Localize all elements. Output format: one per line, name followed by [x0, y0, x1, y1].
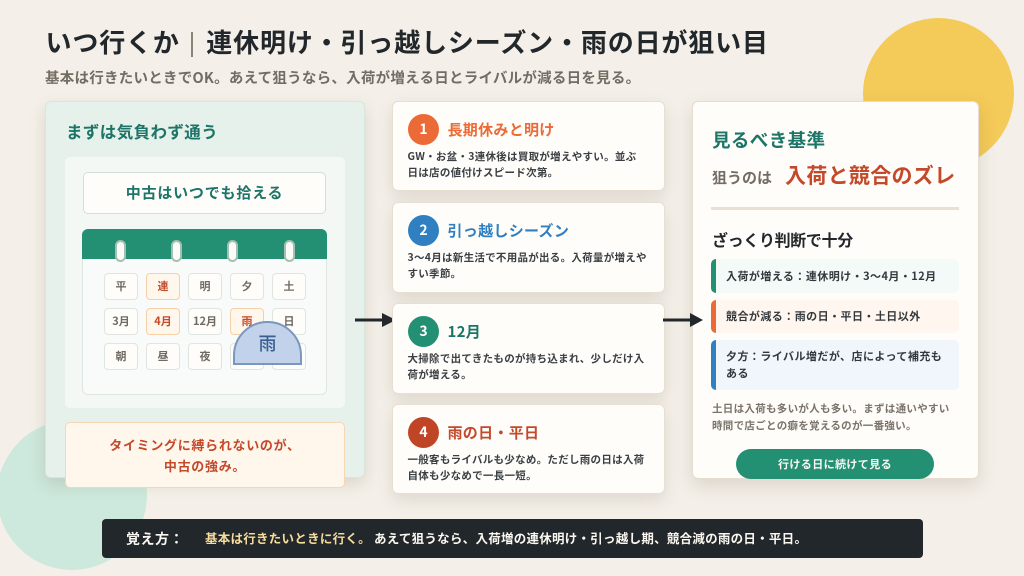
decorative circle: mint: [0, 420, 147, 570]
callout: [65, 422, 345, 488]
callout: 中古の強み。: [164, 456, 246, 475]
icon: rain umbrella dome: [233, 321, 302, 365]
number badge: 1: [419, 119, 428, 139]
number badge: [408, 316, 439, 347]
card body: 荷が増える。: [408, 367, 472, 382]
arrow: cards to right panel: [663, 313, 703, 327]
calendar: 連: [158, 278, 168, 294]
card title: 12月: [448, 321, 481, 342]
button: 行ける日に続けて見る: [778, 456, 892, 472]
calendar: 平: [116, 278, 126, 294]
subtitle: 基本は行きたいときでOK。あえて狙うなら、入荷が増える日とライバルが減る日を見る。: [45, 67, 640, 88]
sub heading: ざっくり判断で十分: [712, 227, 853, 251]
card body: すい季節。: [408, 266, 461, 281]
summary label: 覚え方：: [126, 529, 184, 549]
row: stock increases: [711, 259, 959, 293]
calendar: [82, 229, 327, 395]
row text: 入荷が増える：連休明け・3〜4月・12月: [726, 268, 937, 284]
number badge: 2: [419, 220, 428, 240]
row text: 競合が減る：雨の日・平日・土日以外: [726, 308, 921, 324]
number badge: 3: [419, 321, 428, 341]
calendar: 明: [200, 278, 210, 294]
target line: [712, 160, 955, 190]
callout: タイミングに縛られないのが、: [109, 435, 301, 454]
number badge: 4: [419, 422, 428, 442]
card title: 引っ越しシーズン: [448, 220, 569, 241]
card body: 大掃除で出てきたものが持ち込まれ、少しだけ入: [408, 351, 644, 366]
calendar: 日: [284, 313, 294, 329]
panel heading: まずは気負わず通う: [66, 119, 218, 143]
card body: [408, 250, 647, 281]
calendar header: [82, 228, 326, 258]
decorative circle: yellow: [863, 18, 1014, 169]
panel: right, criteria: [692, 101, 979, 479]
card body: [408, 452, 644, 483]
card title: 長期休みと明け: [448, 119, 555, 140]
criteria heading: 見るべき基準: [712, 127, 825, 153]
note: 土日は入荷も多いが人も多い。まずは通いやすい: [712, 401, 950, 416]
note: 時間で店ごとの癖を覚えるのが一番強い。: [712, 418, 917, 432]
row text: ある: [726, 365, 749, 381]
card 3: [392, 303, 665, 394]
title: いつ行くか 連休明け・引っ越しシーズン・雨の日が狙い目: [46, 23, 769, 60]
card body: 3〜4月は新生活で不用品が出る。入荷量が増えや: [408, 250, 647, 265]
card body: GW・お盆・3連休後は買取が増えやすい。並ぶ: [408, 149, 636, 164]
calendar: 夕: [242, 278, 252, 294]
card 2: [392, 202, 665, 293]
divider: [711, 207, 959, 210]
calendar: 昼: [158, 348, 168, 364]
card body: [408, 351, 644, 382]
row: competition decreases: [711, 300, 959, 333]
target emphasis: 入荷と競合のズレ: [785, 160, 955, 190]
row text: 夕方：ライバル増だが、店によって補充も: [726, 348, 942, 364]
card title: 雨の日・平日: [448, 422, 539, 443]
calendar: 雨: [242, 313, 252, 329]
card 4: [392, 404, 665, 494]
panel background: [45, 101, 365, 478]
label box: [83, 172, 326, 214]
button: [736, 449, 934, 479]
card 1: [392, 101, 665, 191]
calendar: 夜: [200, 348, 210, 364]
row text: [726, 348, 942, 381]
number badge: [408, 114, 439, 145]
number badge: [408, 417, 439, 448]
card body: 一般客もライバルも少なめ。ただし雨の日は入荷: [408, 452, 644, 467]
card body: 日は店の値付けスピード次第。: [408, 165, 558, 180]
arrow: left to cards: [355, 313, 392, 327]
note: [712, 401, 950, 432]
calendar: 土: [284, 278, 294, 294]
label box: 中古はいつでも拾える: [126, 182, 283, 203]
icon: rain umbrella dome: 雨: [258, 330, 276, 356]
summary text: 基本は行きたいときに行く。 あえて狙うなら、入荷増の連休明け・引っ越し期、競合減の雨の日・平日。: [205, 528, 807, 547]
calendar: 12月: [193, 313, 217, 329]
row: evening: [711, 340, 959, 390]
calendar: 朝: [116, 348, 126, 364]
panel: left, go casually: [40, 101, 370, 490]
card body: [408, 149, 636, 180]
number badge: [408, 215, 439, 246]
target label: 狙うのは: [712, 167, 772, 188]
calendar: 4月: [154, 313, 172, 329]
bottom summary bar: [102, 519, 923, 558]
card body: 自体も少なめで一長一短。: [408, 468, 537, 483]
inner white panel: [65, 157, 345, 408]
calendar: 3月: [112, 313, 130, 329]
